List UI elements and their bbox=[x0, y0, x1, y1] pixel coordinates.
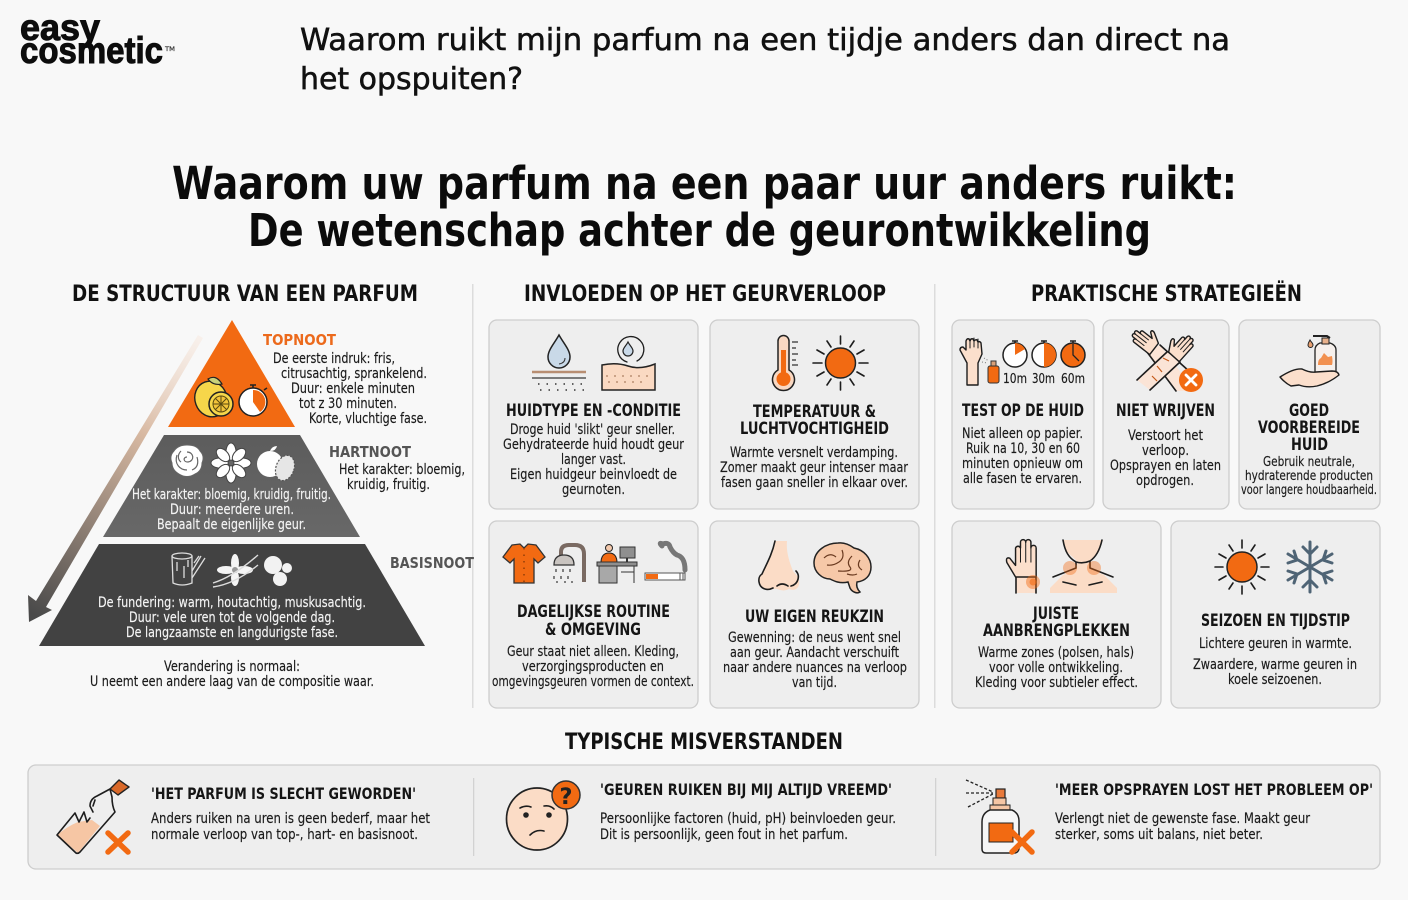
label: topnoot: Duur: enkele minuten bbox=[291, 381, 415, 397]
icon: neck with spots bbox=[1050, 540, 1117, 593]
panel: test op de huid: TEST OP DE HUID bbox=[962, 401, 1084, 420]
main title: De wetenschap achter de geurontwikkeling bbox=[248, 204, 1151, 257]
panel: seizoen en tijdstip bbox=[1171, 521, 1380, 708]
panel: reukzin bbox=[710, 521, 919, 708]
caption: Verandering is normaal: bbox=[164, 659, 300, 675]
panel: juiste aanbrengplekken: Warme zones (polsen, hals) bbox=[978, 645, 1134, 661]
panel: niet wrijven bbox=[1103, 320, 1229, 509]
label: hartnoot: HARTNOOT bbox=[329, 443, 412, 461]
icon: confused face bbox=[506, 781, 580, 850]
panel: huidtype: Gehydrateerde huid houdt geur bbox=[503, 437, 684, 453]
label: topnoot: De eerste indruk: fris, bbox=[273, 351, 395, 367]
heading: structuur: DE STRUCTUUR VAN EEN PARFUM bbox=[72, 282, 418, 307]
panel: huidtype: langer vast. bbox=[561, 452, 626, 468]
icon: rose bbox=[171, 445, 203, 476]
panel: temperatuur: Zomer maakt geur intenser maar bbox=[720, 460, 908, 476]
icon: lemon and lime bbox=[190, 377, 233, 421]
icon: musk bubbles bbox=[264, 556, 292, 586]
panel: dagelijkse routine: omgevingsgeuren vormen de context. bbox=[492, 674, 694, 690]
icon: pump bottle and hand bbox=[1280, 336, 1339, 387]
panel: juiste aanbrengplekken: JUISTE bbox=[1032, 604, 1079, 623]
icon: fruit bbox=[257, 446, 298, 483]
icon: crossed arms bbox=[1129, 323, 1196, 391]
panel: juiste aanbrengplekken bbox=[952, 521, 1161, 708]
panel: pyramid bbox=[28, 320, 475, 690]
label: topnoot: citrusachtig, sprankelend. bbox=[281, 366, 427, 382]
caption: U neemt een andere laag van de compositie waar. bbox=[90, 674, 374, 690]
pyramid middle layer: Duur: meerdere uren. bbox=[170, 502, 294, 518]
label: hartnoot bbox=[329, 443, 465, 493]
panel: seizoen en tijdstip: SEIZOEN EN TIJDSTIP bbox=[1201, 611, 1350, 630]
misconception 1: 'HET PARFUM IS SLECHT GEWORDEN' bbox=[151, 784, 416, 803]
icon: shirt bbox=[503, 544, 545, 583]
question heading: Waarom ruikt mijn parfum na een tijdje anders dan direct na bbox=[300, 23, 1230, 58]
label: topnoot bbox=[263, 331, 427, 427]
misconception 1 bbox=[151, 784, 430, 843]
panel: seizoen en tijdstip: koele seizoenen. bbox=[1228, 672, 1322, 688]
panel: reukzin: Gewenning: de neus went snel bbox=[728, 630, 901, 646]
label: topnoot: Korte, vluchtige fase. bbox=[309, 411, 427, 427]
panel: dagelijkse routine bbox=[489, 521, 698, 708]
heading: strategieen: PRAKTISCHE STRATEGIEËN bbox=[1031, 281, 1302, 307]
misconception 3: sterker, soms uit balans, niet beter. bbox=[1055, 827, 1263, 843]
panel: goed voorbereide huid: Gebruik neutrale, bbox=[1263, 455, 1355, 470]
caption bbox=[90, 659, 374, 690]
icon: x badge bbox=[1179, 368, 1203, 392]
icon: shower bbox=[554, 545, 584, 583]
panel: temperatuur: Warmte versnelt verdamping. bbox=[730, 445, 898, 461]
panel: juiste aanbrengplekken: voor volle ontwikkeling. bbox=[989, 660, 1123, 676]
misconception 2: 'GEUREN RUIKEN BIJ MIJ ALTIJD VREEMD' bbox=[600, 780, 892, 799]
icon: brain bbox=[814, 543, 871, 593]
pyramid middle layer bbox=[103, 435, 360, 537]
panel: dagelijkse routine: verzorgingsproducten en bbox=[522, 659, 664, 675]
panel: dagelijkse routine: DAGELIJKSE ROUTINE bbox=[517, 602, 670, 621]
label: basisnoot: BASISNOOT bbox=[390, 554, 475, 572]
panel: reukzin: naar andere nuances na verloop bbox=[723, 660, 907, 676]
panel: seizoen en tijdstip: Lichtere geuren in warmte. bbox=[1199, 636, 1352, 652]
panel: niet wrijven: NIET WRIJVEN bbox=[1116, 401, 1215, 420]
icon: broken bottle bbox=[57, 780, 129, 853]
panel: goed voorbereide huid: GOED bbox=[1289, 401, 1329, 420]
panel: test op de huid: alle fasen te ervaren. bbox=[963, 471, 1082, 487]
panel: goed voorbereide huid: hydraterende producten bbox=[1245, 469, 1373, 484]
panel: goed voorbereide huid bbox=[1239, 320, 1380, 509]
panel: huidtype bbox=[489, 320, 698, 509]
main title: Waarom uw parfum na een paar uur anders ruikt: bbox=[172, 157, 1237, 210]
icon: thermometer bbox=[772, 336, 798, 391]
panel: juiste aanbrengplekken: Kleding voor subtieler effect. bbox=[975, 675, 1138, 691]
panel: goed voorbereide huid: HUID bbox=[1291, 435, 1328, 454]
label: topnoot: tot z 30 minuten. bbox=[299, 396, 397, 412]
icon: stopwatch bbox=[239, 385, 267, 416]
icon: hydrated skin bbox=[602, 337, 655, 390]
heading: misverstanden: TYPISCHE MISVERSTANDEN bbox=[565, 730, 843, 755]
misconception 2: Persoonlijke factoren (huid, pH) beinvloeden geur. bbox=[600, 811, 896, 827]
panel: test op de huid: Niet alleen op papier. bbox=[962, 426, 1083, 442]
label: topnoot: TOPNOOT bbox=[263, 331, 337, 349]
panel: temperatuur: LUCHTVOCHTIGHEID bbox=[740, 419, 889, 438]
logo: easy cosmetic: easy bbox=[20, 7, 100, 48]
icon: spray bottle with x bbox=[966, 780, 1032, 853]
pyramid middle layer: Het karakter: bloemig, kruidig, fruitig. bbox=[132, 487, 331, 503]
icon: confused face: ? bbox=[560, 785, 572, 810]
panel: reukzin: UW EIGEN REUKZIN bbox=[745, 607, 884, 626]
logo: easy cosmetic bbox=[20, 7, 175, 71]
question heading: het opspuiten? bbox=[300, 62, 523, 97]
arrow: time progression bbox=[28, 335, 203, 622]
time labels: 10m bbox=[1003, 372, 1027, 387]
icon: three timers bbox=[1003, 341, 1085, 367]
logo: easy cosmetic: cosmetic bbox=[20, 30, 163, 71]
icon: hand with wrist spot bbox=[1006, 540, 1040, 593]
pyramid base layer bbox=[39, 544, 425, 646]
question heading bbox=[300, 23, 1230, 97]
icon: sun bbox=[1215, 540, 1269, 594]
pyramid middle layer: Bepaalt de eigenlijke geur. bbox=[157, 517, 306, 533]
misconception 1: Anders ruiken na uren is geen bederf, maar het bbox=[151, 811, 430, 827]
icon: cigarette bbox=[645, 543, 685, 580]
icon: flower bbox=[211, 443, 251, 483]
panel: dagelijkse routine: Geur staat niet alleen. Kleding, bbox=[507, 644, 679, 660]
heading: invloeden: INVLOEDEN OP HET GEURVERLOOP bbox=[524, 282, 886, 307]
time labels bbox=[1003, 372, 1085, 387]
pyramid base layer: Duur: vele uren tot de volgende dag. bbox=[129, 610, 335, 626]
label: hartnoot: Het karakter: bloemig, bbox=[339, 462, 465, 478]
panel: huidtype: Eigen huidgeur beinvloedt de bbox=[510, 467, 677, 483]
misconception 2: Dit is persoonlijk, geen fout in het parfum. bbox=[600, 827, 848, 843]
misconception 1: normale verloop van top-, hart- en basisnoot. bbox=[151, 827, 418, 843]
time labels: 60m bbox=[1061, 372, 1085, 387]
panel: niet wrijven: Verstoort het bbox=[1128, 428, 1203, 444]
label: hartnoot: kruidig, fruitig. bbox=[347, 477, 430, 493]
panel: dagelijkse routine: & OMGEVING bbox=[545, 620, 641, 639]
misconception 2 bbox=[600, 780, 896, 843]
icon: vanilla bbox=[213, 554, 258, 587]
logo: easy cosmetic: TM bbox=[164, 46, 175, 53]
panel: test op de huid bbox=[952, 320, 1094, 509]
panel: niet wrijven: opdrogen. bbox=[1136, 473, 1194, 489]
misconception 3: Verlengt niet de gewenste fase. Maakt geur bbox=[1055, 811, 1310, 827]
panel: juiste aanbrengplekken: AANBRENGPLEKKEN bbox=[983, 621, 1130, 640]
icon: nose bbox=[759, 541, 799, 590]
panel: reukzin: aan geur. Aandacht verschuift bbox=[730, 645, 899, 661]
pyramid base layer: De langzaamste en langdurigste fase. bbox=[126, 625, 338, 641]
panel: misverstanden bbox=[28, 765, 1380, 869]
panel: reukzin: van tijd. bbox=[792, 675, 837, 691]
icon: sun bbox=[813, 336, 868, 390]
pyramid top layer bbox=[168, 320, 295, 427]
icon: drop on skin bbox=[532, 335, 586, 390]
main title bbox=[172, 157, 1237, 257]
panel: temperatuur bbox=[710, 320, 919, 509]
panel: niet wrijven: Opsprayen en laten bbox=[1110, 458, 1221, 474]
panel: goed voorbereide huid: VOORBEREIDE bbox=[1258, 418, 1360, 437]
panel: temperatuur: fasen gaan sneller in elkaar over. bbox=[721, 475, 908, 491]
panel: seizoen en tijdstip: Zwaardere, warme geuren in bbox=[1193, 657, 1357, 673]
icon: fist and spray bbox=[960, 338, 999, 385]
panel: test op de huid: Ruik na 10, 30 en 60 bbox=[966, 441, 1080, 457]
panel: huidtype: geurnoten. bbox=[562, 482, 625, 498]
time labels: 30m bbox=[1032, 372, 1055, 387]
panel: niet wrijven: verloop. bbox=[1142, 443, 1189, 459]
panel: temperatuur: TEMPERATUUR & bbox=[753, 402, 876, 421]
panel: huidtype: Droge huid 'slikt' geur sneller. bbox=[510, 422, 675, 438]
pyramid base layer: De fundering: warm, houtachtig, muskusachtig. bbox=[98, 595, 366, 611]
icon: snowflake bbox=[1288, 542, 1332, 592]
icon: wood bbox=[172, 553, 205, 585]
panel: test op de huid: minuten opnieuw om bbox=[962, 456, 1083, 472]
panel: huidtype: HUIDTYPE EN -CONDITIE bbox=[506, 401, 681, 420]
icon: desk bbox=[597, 544, 637, 583]
misconception 3 bbox=[1055, 780, 1373, 843]
